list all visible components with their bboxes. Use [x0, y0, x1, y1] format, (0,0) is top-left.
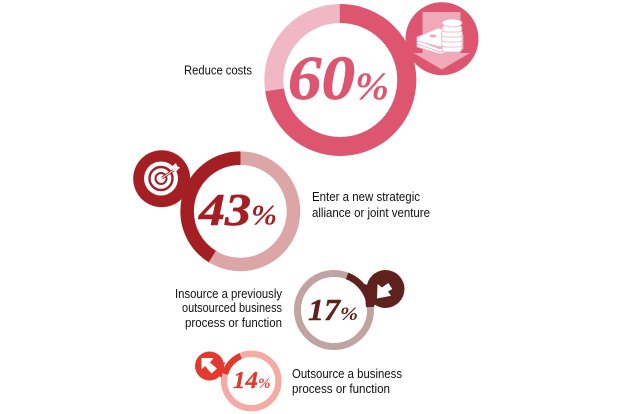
icon: outward arrow — [195, 352, 225, 380]
label: insource: Insource a previously — [175, 286, 282, 301]
value: 14%: % — [258, 376, 270, 392]
icon: money with down arrow — [406, 2, 478, 75]
value: 14%: 14 — [233, 368, 258, 394]
label: strategic alliance: Enter a new strategic — [312, 189, 420, 204]
ring chart: 60% reduce costs — [274, 14, 407, 146]
label: insource: outsourced business — [182, 300, 282, 315]
icon: inward arrow — [364, 270, 404, 308]
label: insource — [175, 286, 282, 330]
label: outsource: process or function — [292, 381, 390, 396]
ring chart: 14% outsource — [224, 354, 278, 408]
ring chart: 17% insource — [298, 274, 370, 346]
value: 43%: % — [251, 200, 277, 232]
label: outsource — [292, 366, 402, 396]
icon: target with dart — [133, 150, 190, 207]
value: 17% — [308, 292, 358, 327]
value: 17%: % — [340, 304, 358, 325]
value: 60%: % — [355, 65, 389, 108]
value: 60% — [288, 45, 389, 113]
label: strategic alliance: alliance or joint venture — [312, 205, 430, 220]
value: 43%: 43 — [198, 185, 251, 235]
label: insource: process or function — [185, 315, 282, 330]
label: outsource: Outsource a business — [292, 366, 402, 381]
ring chart: 43% strategic alliance — [187, 158, 294, 264]
value: 43% — [198, 185, 277, 235]
value: 60%: 60 — [288, 45, 355, 113]
value: 14% — [233, 368, 270, 394]
label: strategic alliance — [312, 189, 430, 220]
value: 17%: 17 — [308, 292, 342, 327]
label: reduce costs: Reduce costs — [184, 62, 252, 78]
